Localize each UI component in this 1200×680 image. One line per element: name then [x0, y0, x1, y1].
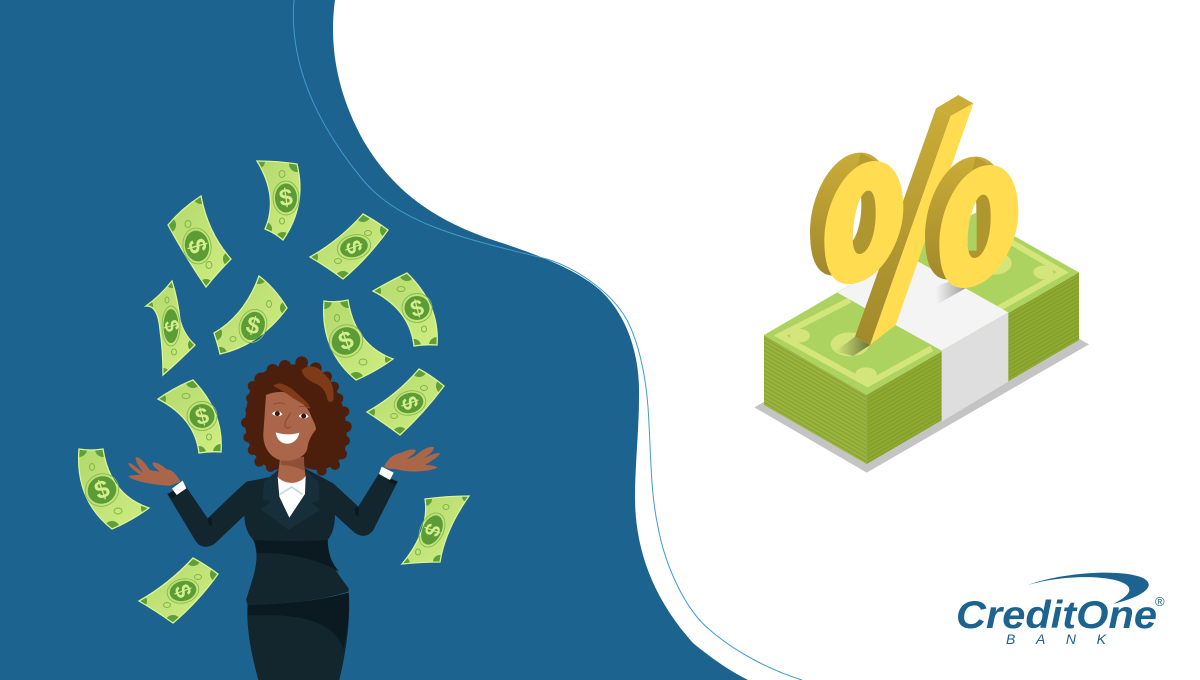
logo bank text: BANK — [1006, 631, 1107, 647]
bill 5: $ — [243, 311, 264, 341]
skirt shadow — [248, 593, 349, 650]
left bill border — [780, 300, 932, 384]
bill 11: $ — [169, 581, 197, 601]
stack right side — [867, 272, 1079, 464]
hair highlights — [273, 366, 334, 407]
smile — [276, 432, 299, 444]
bill 9: $ — [192, 402, 212, 430]
Credit One Bank logo — [956, 573, 1165, 647]
left circle of percent — [810, 153, 903, 284]
left hand — [128, 457, 181, 486]
paper band front — [942, 312, 1008, 422]
nose — [285, 413, 291, 428]
eyebrows — [273, 403, 310, 408]
logo swoosh — [1028, 573, 1149, 604]
shirt — [278, 476, 306, 518]
shirt cuffs — [172, 467, 394, 495]
stack left side — [764, 335, 867, 464]
bill 11 — [138, 557, 219, 624]
paper band top — [837, 254, 1008, 351]
stack top bill — [764, 213, 1079, 395]
bill 1: $ — [278, 184, 295, 212]
percent sign — [810, 95, 1018, 345]
eyes — [272, 411, 309, 418]
bill 8: $ — [396, 393, 424, 413]
bill 6 — [322, 299, 394, 381]
hair — [241, 356, 352, 476]
bill 7: $ — [407, 294, 427, 322]
bill 7 — [372, 272, 438, 347]
blue background panel — [0, 0, 748, 680]
bill 9 — [156, 379, 222, 454]
right circle of percent — [925, 157, 1018, 288]
jacket with arms — [167, 468, 398, 605]
bill 5 — [213, 275, 288, 355]
right bill border — [978, 239, 1063, 312]
skirt — [247, 593, 349, 680]
ground shadow — [754, 280, 1089, 473]
bill 12: $ — [419, 521, 445, 540]
right hand — [384, 447, 440, 472]
neck — [278, 458, 306, 483]
bill 10 — [78, 448, 150, 530]
bill 3 — [308, 213, 389, 280]
bill 2 — [167, 195, 232, 288]
bill 4: $ — [159, 318, 183, 334]
bill 10: $ — [91, 474, 113, 506]
waist shadow — [253, 540, 339, 572]
logo wordmark: CreditOne — [956, 594, 1157, 637]
right circle shadow — [936, 280, 965, 305]
neck shadow — [281, 457, 304, 471]
falling money bills — [71, 153, 476, 631]
thin curved accent line — [293, 0, 802, 680]
stack of cash with percent sign — [754, 95, 1089, 473]
bill 8 — [366, 368, 445, 436]
slash contact shadow — [835, 337, 870, 356]
face — [263, 392, 316, 461]
sleeve folds — [167, 478, 398, 527]
bill 12 — [400, 495, 470, 565]
woman in business suit — [128, 356, 440, 680]
bill 3: $ — [340, 237, 368, 257]
lapels — [261, 468, 320, 530]
shirt collar — [279, 487, 302, 495]
bill 1 — [256, 160, 301, 241]
logo registered mark: ® — [1155, 594, 1165, 609]
percent slash — [855, 95, 973, 345]
bill 4 — [144, 280, 196, 376]
bill 2: $ — [182, 236, 212, 256]
bill 6: $ — [335, 325, 357, 357]
